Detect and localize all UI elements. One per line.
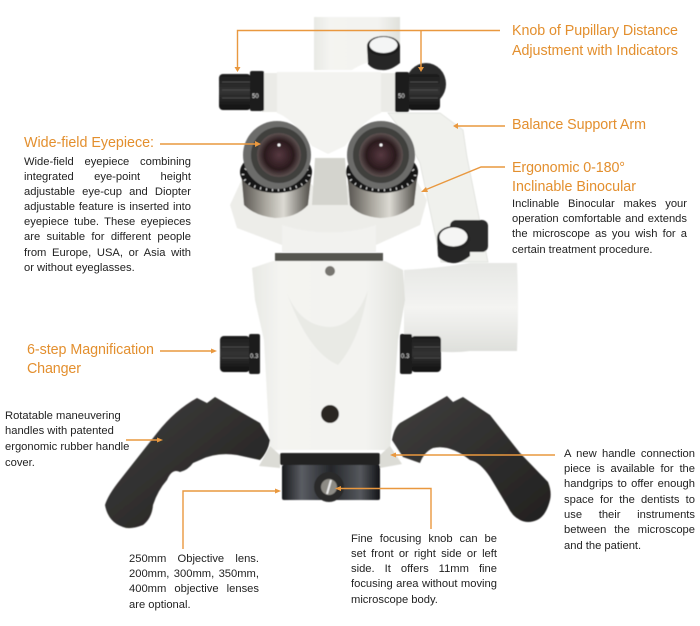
icon: right pupillary knob [395,72,440,112]
heading: magnification changer: Changer [27,361,81,377]
connection pieces [259,446,402,468]
objective ring [280,453,380,465]
icon: right magnification knob: 0.3 [401,354,410,360]
icon: right magnification knob [400,334,441,374]
icon: left pupillary knob [219,71,264,111]
icon: rear indicator knob [406,63,446,105]
heading: ergonomic binocular: Inclinable Binocular [512,179,636,195]
text: eyepiece description: are suitable for different people [24,231,191,243]
text: eyepiece description: or without eyeglasses. [24,262,135,274]
text: fine focusing: side. It offers 11mm fine [351,563,497,575]
arrow: eyepiece [160,141,261,147]
arrow: handle connection [390,452,555,458]
left eyepiece [240,121,312,218]
heading: magnification changer [27,342,154,377]
heading: magnification changer: 6-step Magnification [27,342,154,358]
balance support arm [388,113,488,262]
icon: top knob [367,36,400,70]
text: binocular description: operation comfortable and extends [512,213,687,225]
icon: fine focusing knob [314,472,344,502]
text: handles [5,410,129,469]
heading: ergonomic binocular [512,160,636,195]
text: objective lens: 400mm objective lenses [129,583,259,595]
text: eyepiece description: adjustable feature is inserted into [24,201,191,213]
objective cylinder [282,465,380,500]
text: binocular description: Inclinable Binocular makes your [512,198,687,210]
top column [314,17,400,70]
icon: arm knob [437,220,488,263]
text: binocular description [512,198,687,256]
text: objective lens [129,553,259,611]
text: eyepiece description: integrated eye-point height [24,171,191,183]
text: eyepiece description [24,156,191,274]
arrow: balance support arm [453,123,505,129]
text: fine focusing [351,533,497,606]
arrow: ergonomic binocular [421,167,505,192]
text: fine focusing: Fine focusing knob can be [351,533,497,545]
neck screw [325,266,335,276]
right handle [392,396,551,522]
arrow: fine focus [335,486,431,529]
heading: pupillary distance [512,23,678,59]
icon: left magnification knob [220,334,260,374]
heading: wide-field eyepiece: Wide-field Eyepiece: [24,135,154,151]
icon: left magnification knob: 0.3 [250,354,259,360]
text: eyepiece description: Wide-field eyepiece combining [24,156,191,168]
heading: ergonomic binocular: Ergonomic 0-180° [512,160,625,176]
left handle [105,397,270,528]
text: handle connection: piece is available for the [564,463,695,475]
text: fine focusing: set front or right side or left [351,548,497,560]
V-shaped body recess [287,290,368,365]
text: handle connection: A new handle connection [564,448,695,460]
body button [321,405,339,423]
icon: left pupillary knob: 50 [252,94,259,100]
eyepiece carrier [230,177,427,252]
text: handles: ergonomic rubber handle [5,441,129,453]
neck ring [275,253,383,262]
microscope illustration [105,17,551,528]
text: handles: cover. [5,457,35,469]
text: handle connection: and the patient. [564,540,641,552]
binocular side collars [262,73,396,112]
grey centre recess [312,158,348,205]
text: objective lens: are optional. [129,599,191,611]
icon: right pupillary knob: 50 [398,94,405,100]
binocular head [277,72,381,154]
text: eyepiece description: eyepiece tube. These eyepieces [24,216,191,228]
text: handles: handles with patented [5,425,114,437]
right eyepiece [346,121,418,218]
text: objective lens: 250mm Objective lens. [129,553,259,565]
arrow: objective lens [183,488,281,549]
arrow: pupillary distance [234,30,500,72]
neck [282,225,376,252]
text: handles: Rotatable maneuvering [5,410,121,422]
text: handle connection: between the microscope [564,524,695,536]
side tube [404,263,518,352]
text: handle connection: handgrips to offer enough [564,478,695,490]
main body [252,261,405,450]
arrow: magnification [160,348,217,354]
text: handle connection: space for the dentists to [564,494,695,506]
text: binocular description: certain treatment procedure. [512,244,653,256]
text: fine focusing: focusing area without moving [351,578,497,590]
text: eyepiece description: from Europe, USA, or Asia with [24,247,191,259]
heading: pupillary distance: Adjustment with Indicators [512,43,678,59]
text: handle connection [564,448,695,552]
text: binocular description: the microscope as you wish for a [512,228,687,240]
heading: pupillary distance: Knob of Pupillary Distance [512,23,678,39]
arrow: handles [126,438,163,442]
text: fine focusing: microscope body. [351,594,438,606]
text: objective lens: 200mm, 300mm, 350mm, [129,568,259,580]
heading: balance support arm: Balance Support Arm [512,117,646,133]
text: handle connection: use their instruments [564,509,695,521]
text: eyepiece description: adjustable eye-cup and Diopter [24,186,191,198]
